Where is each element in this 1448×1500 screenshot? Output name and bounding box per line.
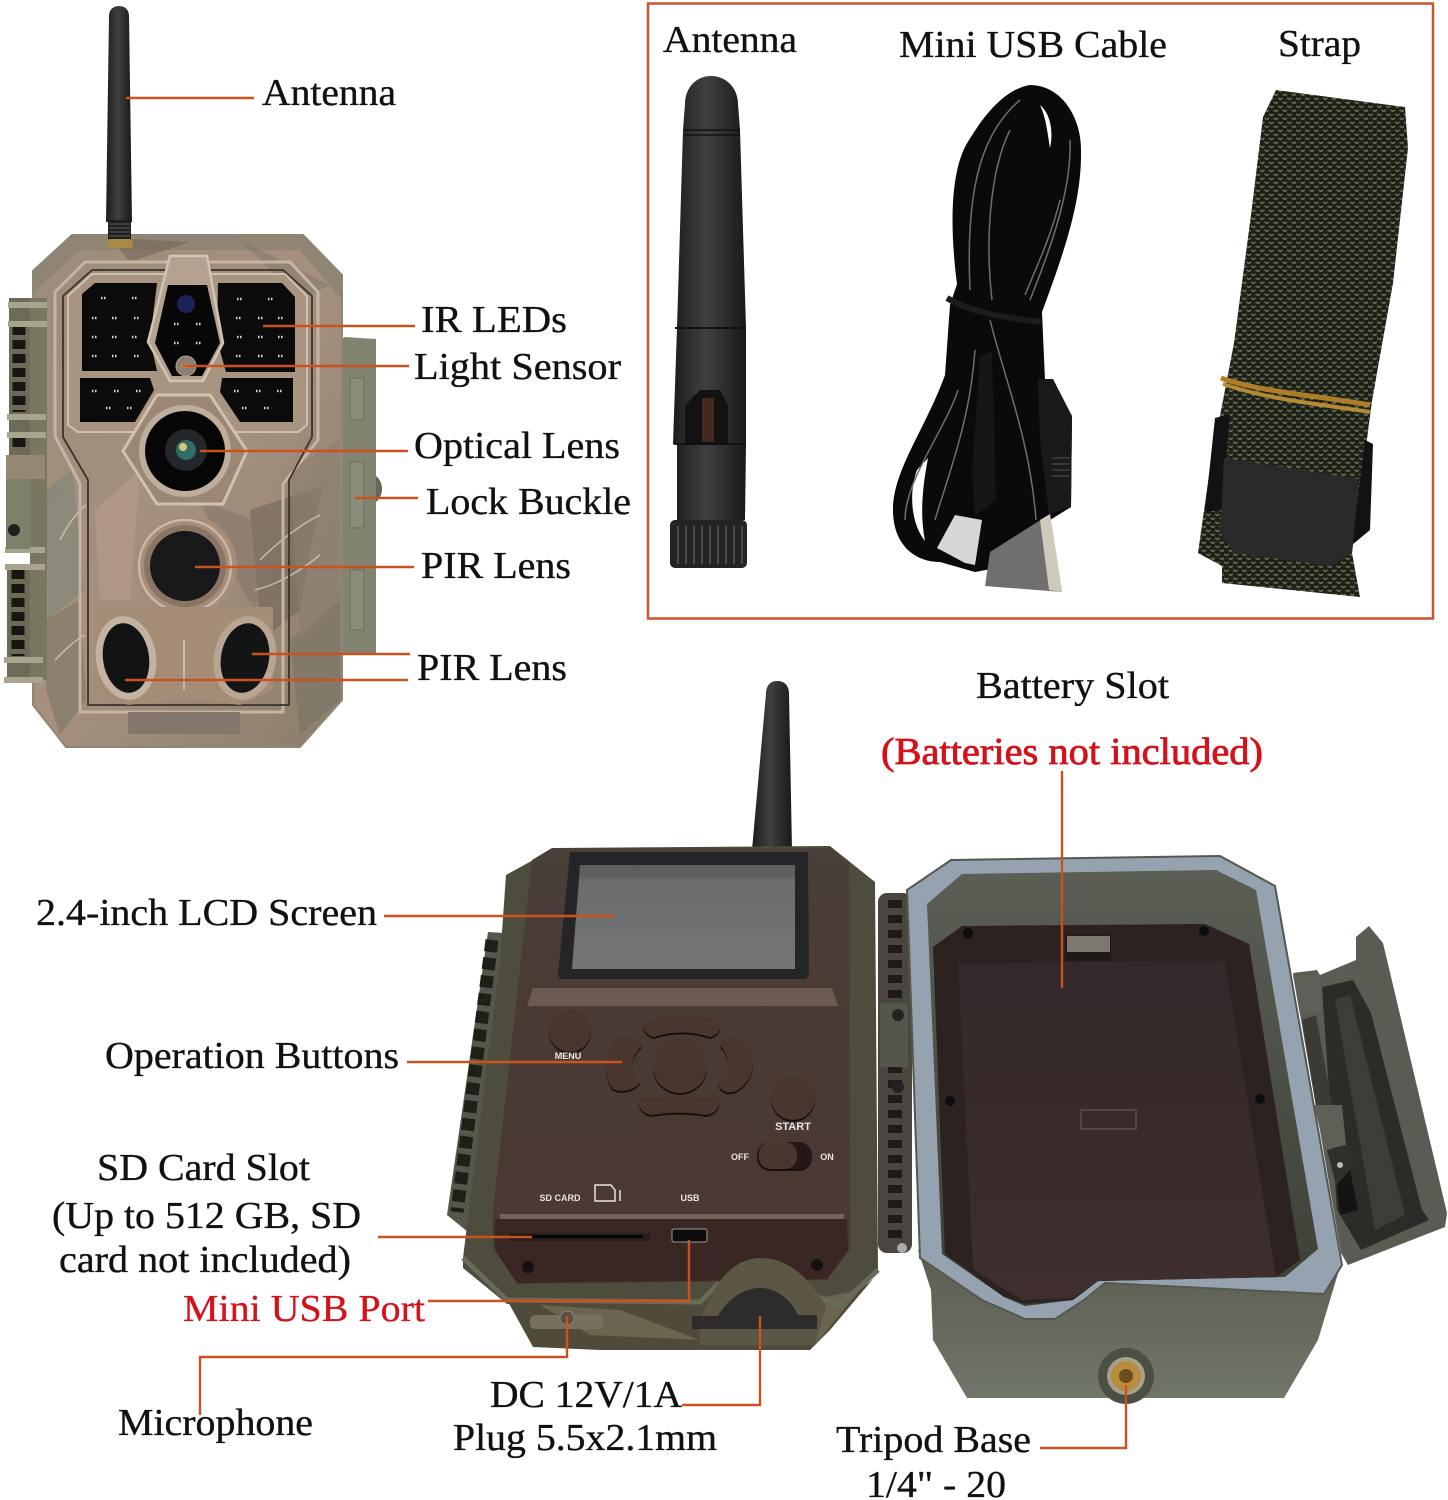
open camera: brown control panel (493, 848, 850, 1284)
open camera: tripod socket (1098, 1348, 1154, 1404)
line: PIR lens right (252, 653, 410, 655)
label: microphone: Microphone (118, 1402, 313, 1444)
line: battery slot (1061, 771, 1063, 988)
label: IR LEDs: IR LEDs (421, 299, 567, 341)
open camera: left fins (447, 932, 504, 1232)
line: DC plug (682, 1316, 760, 1405)
label: SD capacity: (Up to 512 GB, SD (52, 1195, 361, 1237)
front camera: large PIR lens (133, 514, 237, 618)
label: optical lens: Optical Lens (414, 425, 620, 467)
accessories panel (648, 4, 1433, 618)
front camera: lock buckle (325, 335, 382, 657)
front camera: IR panels (80, 283, 295, 422)
label: DC input: DC 12V/1A (490, 1374, 683, 1416)
open camera: textured strip (527, 988, 838, 1006)
front camera: IR LED dots (92, 298, 282, 408)
open camera: antenna (752, 681, 792, 850)
open camera: battery cavity floor (933, 924, 1300, 1304)
line: operation buttons (407, 1061, 622, 1063)
open camera: outer shell (463, 846, 878, 1305)
open camera: panel printed labels: OFF (731, 1152, 749, 1162)
open camera: battery plate (945, 926, 1276, 1300)
open camera: panel printed labels: ON (820, 1152, 834, 1162)
label: plug size: Plug 5.5x2.1mm (453, 1417, 717, 1459)
label: SD not included: card not included) (59, 1239, 351, 1281)
open camera: panel printed labels: USB (680, 1193, 700, 1203)
front camera: camouflage pattern (34, 236, 342, 735)
line: PIR lens (195, 566, 414, 568)
heading: mini USB cable: Mini USB Cable (899, 24, 1167, 66)
line: LCD screen (384, 915, 615, 917)
heading: antenna accessory: Antenna (663, 19, 797, 61)
label: mini USB port: Mini USB Port (183, 1288, 425, 1330)
line: light sensor (183, 365, 409, 367)
panel border (648, 4, 1433, 618)
connector lines (125, 98, 1126, 1448)
open camera: latch (1293, 926, 1447, 1265)
label: LCD screen: 2.4-inch LCD Screen (36, 892, 377, 934)
label: SD card slot: SD Card Slot (97, 1147, 310, 1189)
front camera: lower PIR housing (90, 607, 283, 734)
line: microphone (200, 1316, 567, 1415)
front camera: left hinges (4, 298, 47, 680)
open camera: panel printed labels: START (775, 1121, 811, 1133)
line: tripod base (1040, 1385, 1126, 1448)
open camera: SD slot and mini USB port (510, 1229, 823, 1273)
line: SD card slot (378, 1236, 532, 1238)
label: antenna: Antenna (262, 72, 396, 114)
line: lock buckle (355, 497, 418, 499)
accessory: strap (1198, 90, 1408, 597)
label: lock buckle: Lock Buckle (426, 481, 631, 523)
open camera: panel printed labels: SD CARD (539, 1193, 581, 1203)
open camera: panel printed labels (539, 1051, 834, 1203)
line: IR LEDs (263, 325, 415, 327)
front camera: body (33, 235, 342, 747)
label: PIR lens lower: PIR Lens (417, 647, 567, 689)
label: light sensor: Light Sensor (414, 346, 621, 388)
open camera: seal gasket (907, 856, 1342, 1319)
front camera: antenna (106, 6, 133, 248)
line: mini USB port (428, 1240, 689, 1301)
front camera: optical lens (123, 395, 247, 504)
front camera: IR LED frame (68, 274, 307, 432)
accessory: mini USB cable (893, 85, 1081, 592)
open camera: hinge (878, 893, 912, 1253)
open camera: lower camouflage body (507, 1279, 873, 1350)
open camera: battery door lower body (918, 1250, 1342, 1398)
front camera: sensor keystone (148, 256, 223, 381)
front camera: body ridges (55, 262, 318, 712)
opened camera photo (447, 681, 1447, 1404)
open camera: lower panel step (495, 1214, 848, 1283)
line: PIR lens left (125, 679, 408, 681)
open camera: battery cavity wall (927, 870, 1318, 1306)
line: antenna (126, 97, 254, 99)
label: battery slot: Battery Slot (976, 665, 1169, 707)
line: optical lens (200, 450, 408, 452)
label: tripod base: Tripod Base (836, 1419, 1031, 1461)
open camera: olive rim (463, 1258, 878, 1305)
open camera: panel printed labels: MENU (555, 1051, 581, 1061)
accessory: antenna (670, 76, 747, 568)
label: operation buttons: Operation Buttons (105, 1035, 399, 1077)
label: batteries not included: (Batteries not included) (881, 731, 1263, 773)
label: PIR lens: PIR Lens (421, 545, 571, 587)
open camera: LCD screen (558, 852, 809, 979)
open camera: DC plug cover (692, 1258, 826, 1345)
open camera: operation buttons (549, 1010, 815, 1169)
front camera photo (4, 6, 382, 747)
heading: strap: Strap (1278, 23, 1361, 65)
